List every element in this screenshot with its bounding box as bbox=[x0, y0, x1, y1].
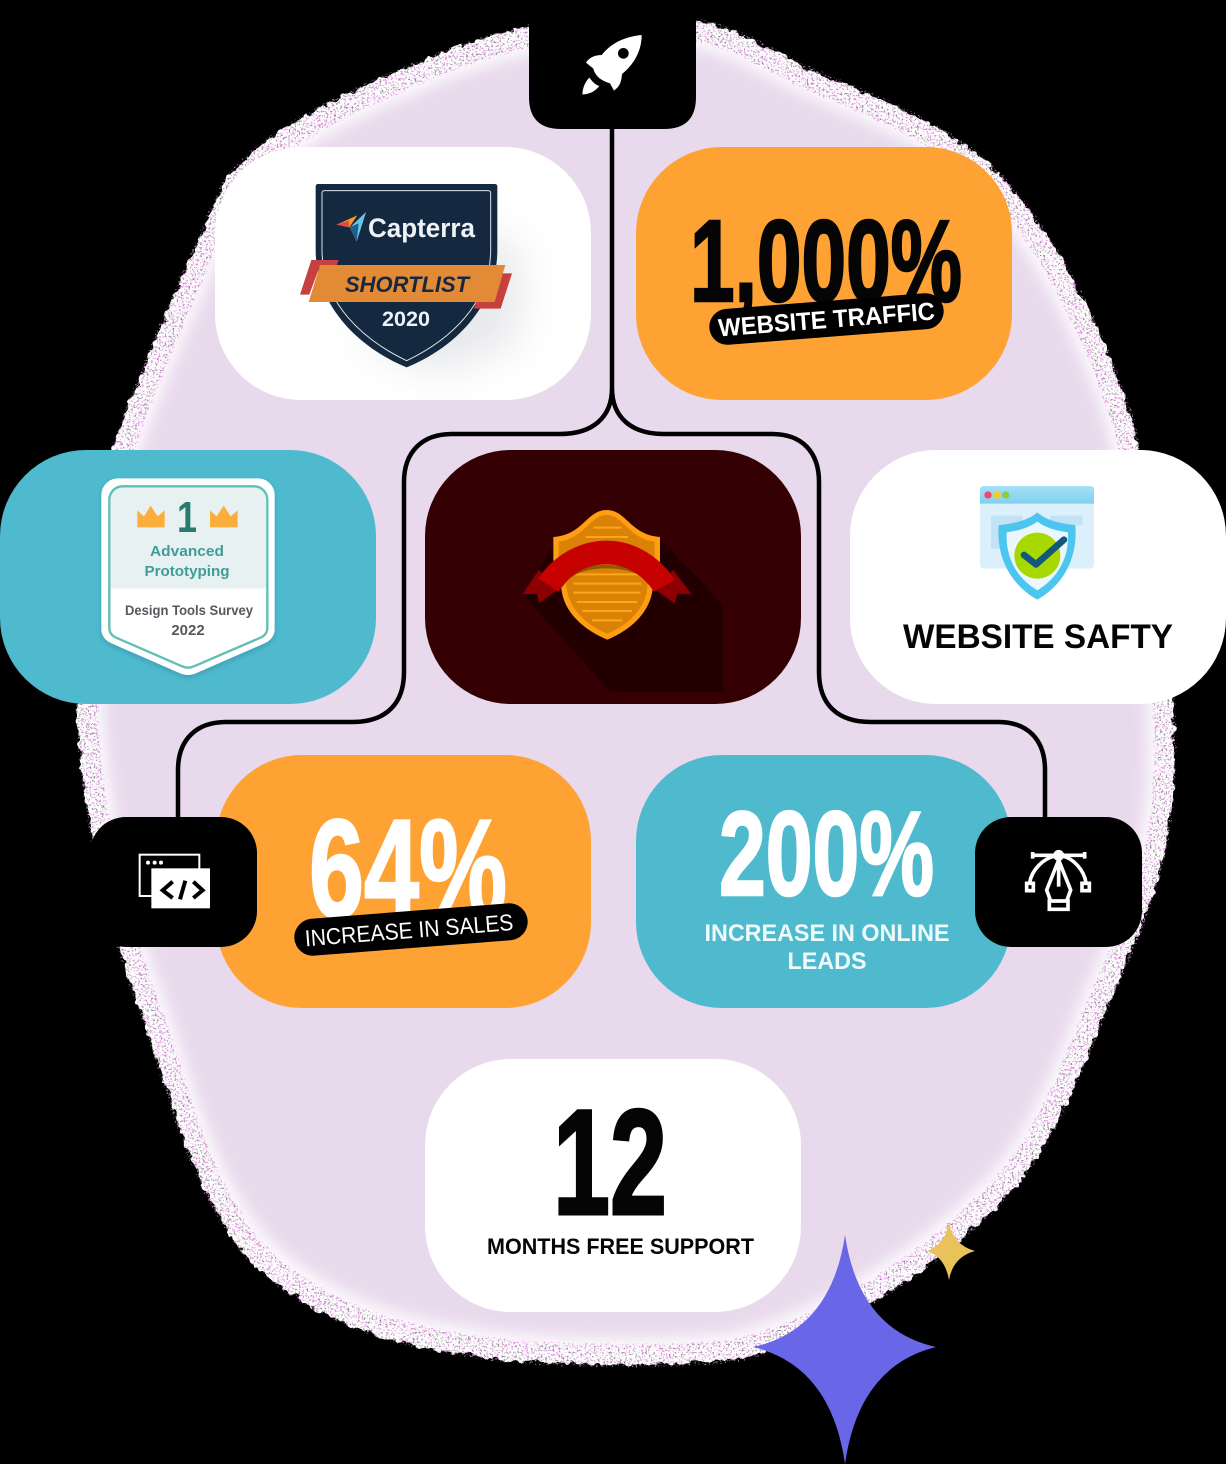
panel: central shield bbox=[425, 450, 801, 704]
tag: code bbox=[90, 817, 257, 947]
icon: code window bbox=[140, 855, 210, 908]
panel: increase in sales bbox=[216, 755, 591, 1008]
tag: pen tool bbox=[975, 817, 1142, 947]
label: increase in online: INCREASE IN ONLINE bbox=[704, 920, 950, 947]
tag: rocket bbox=[529, 0, 696, 129]
stat 1,000%: 1,000% bbox=[690, 196, 962, 326]
label: leads: LEADS bbox=[788, 948, 866, 975]
panel: free support bbox=[425, 1059, 801, 1312]
stat 64%: 64% bbox=[309, 790, 507, 947]
stat 200%: 200% bbox=[719, 787, 934, 921]
shield with ribbon bbox=[523, 510, 723, 692]
badge category line two: Prototyping bbox=[144, 563, 230, 580]
survey year: 2022 bbox=[171, 622, 205, 639]
icon: rocket bbox=[582, 35, 642, 94]
icon: pen tool bbox=[1027, 852, 1089, 909]
pill: increase in sales: INCREASE IN SALES bbox=[304, 909, 514, 951]
stat 12: 12 bbox=[553, 1078, 667, 1246]
survey name: Design Tools Survey bbox=[125, 602, 253, 618]
panel: website traffic bbox=[636, 147, 1012, 400]
panel: website safety bbox=[850, 450, 1226, 704]
connector lines bbox=[178, 129, 1045, 820]
rank number: 1 bbox=[177, 493, 197, 542]
panel: Capterra shortlist bbox=[215, 147, 591, 400]
pill: website traffic: WEBSITE TRAFFIC bbox=[717, 298, 936, 342]
label: website safty: WEBSITE SAFTY bbox=[903, 618, 1173, 656]
icon: browser with shield bbox=[980, 486, 1094, 600]
shortlist label: SHORTLIST bbox=[345, 272, 471, 297]
panel: design tools survey bbox=[0, 450, 376, 704]
badge category: Advanced bbox=[150, 543, 224, 560]
label: months free support: MONTHS FREE SUPPORT bbox=[487, 1234, 755, 1259]
star: small gold bbox=[927, 1222, 975, 1280]
Capterra badge bbox=[300, 184, 520, 373]
star: large blue bbox=[753, 1235, 936, 1464]
Capterra wordmark: Capterra bbox=[368, 213, 476, 243]
survey badge bbox=[101, 478, 275, 678]
year 2020: 2020 bbox=[382, 308, 430, 331]
panel: increase in online leads bbox=[636, 755, 1011, 1008]
